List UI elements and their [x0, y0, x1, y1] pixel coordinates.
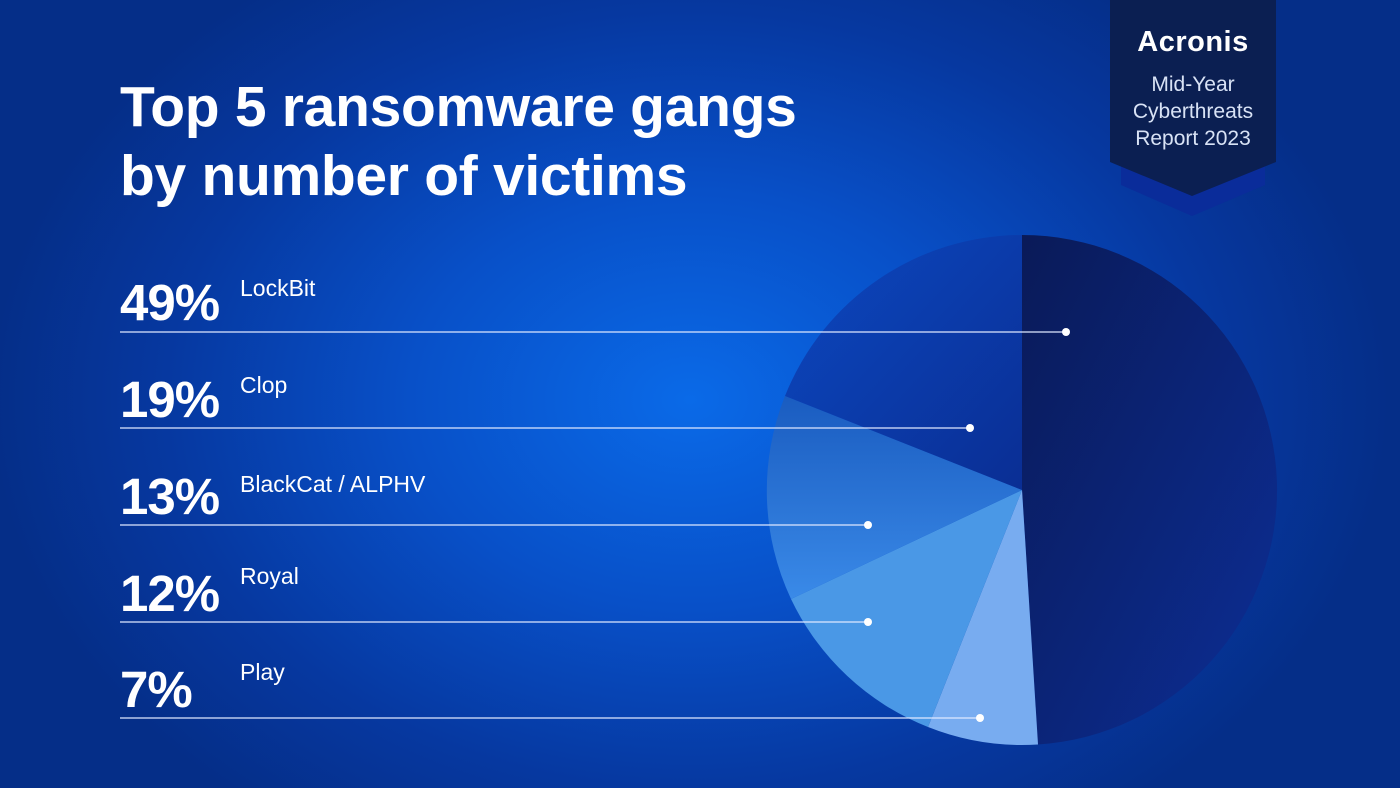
- title: [120, 75, 797, 208]
- report label: Mid-Year: [1151, 73, 1235, 96]
- row: Play: 7%: [120, 661, 192, 718]
- report label: Cyberthreats: [1133, 100, 1253, 123]
- row: LockBit: 49%: [120, 274, 219, 331]
- row: Play: [120, 659, 285, 718]
- row: Play: Play: [240, 659, 285, 685]
- pointer lines: [120, 328, 1070, 722]
- slice: LockBit: [1022, 235, 1277, 744]
- slice: Play: [928, 490, 1038, 745]
- title: by number of victims: [120, 144, 687, 208]
- row: Clop: 19%: [120, 371, 219, 428]
- badge: [1110, 0, 1276, 216]
- row: LockBit: LockBit: [240, 275, 315, 301]
- row: Royal: [120, 563, 299, 622]
- slice: BlackCat: [767, 396, 1022, 599]
- report label: Report 2023: [1135, 127, 1251, 150]
- row: BlackCat: 13%: [120, 468, 219, 525]
- row: Royal: Royal: [240, 563, 299, 589]
- title: Top 5 ransomware gangs: [120, 75, 797, 139]
- row: BlackCat: BlackCat / ALPHV: [240, 471, 425, 497]
- logo: Acronis: [1137, 26, 1249, 58]
- report label: [1133, 73, 1253, 150]
- row: Clop: [120, 371, 287, 428]
- slice: Clop: [785, 235, 1022, 490]
- row: Clop: Clop: [240, 372, 287, 398]
- row: BlackCat: [120, 468, 426, 525]
- row: LockBit: [120, 274, 316, 331]
- row: Royal: 12%: [120, 565, 219, 622]
- slice: Royal: [791, 490, 1022, 727]
